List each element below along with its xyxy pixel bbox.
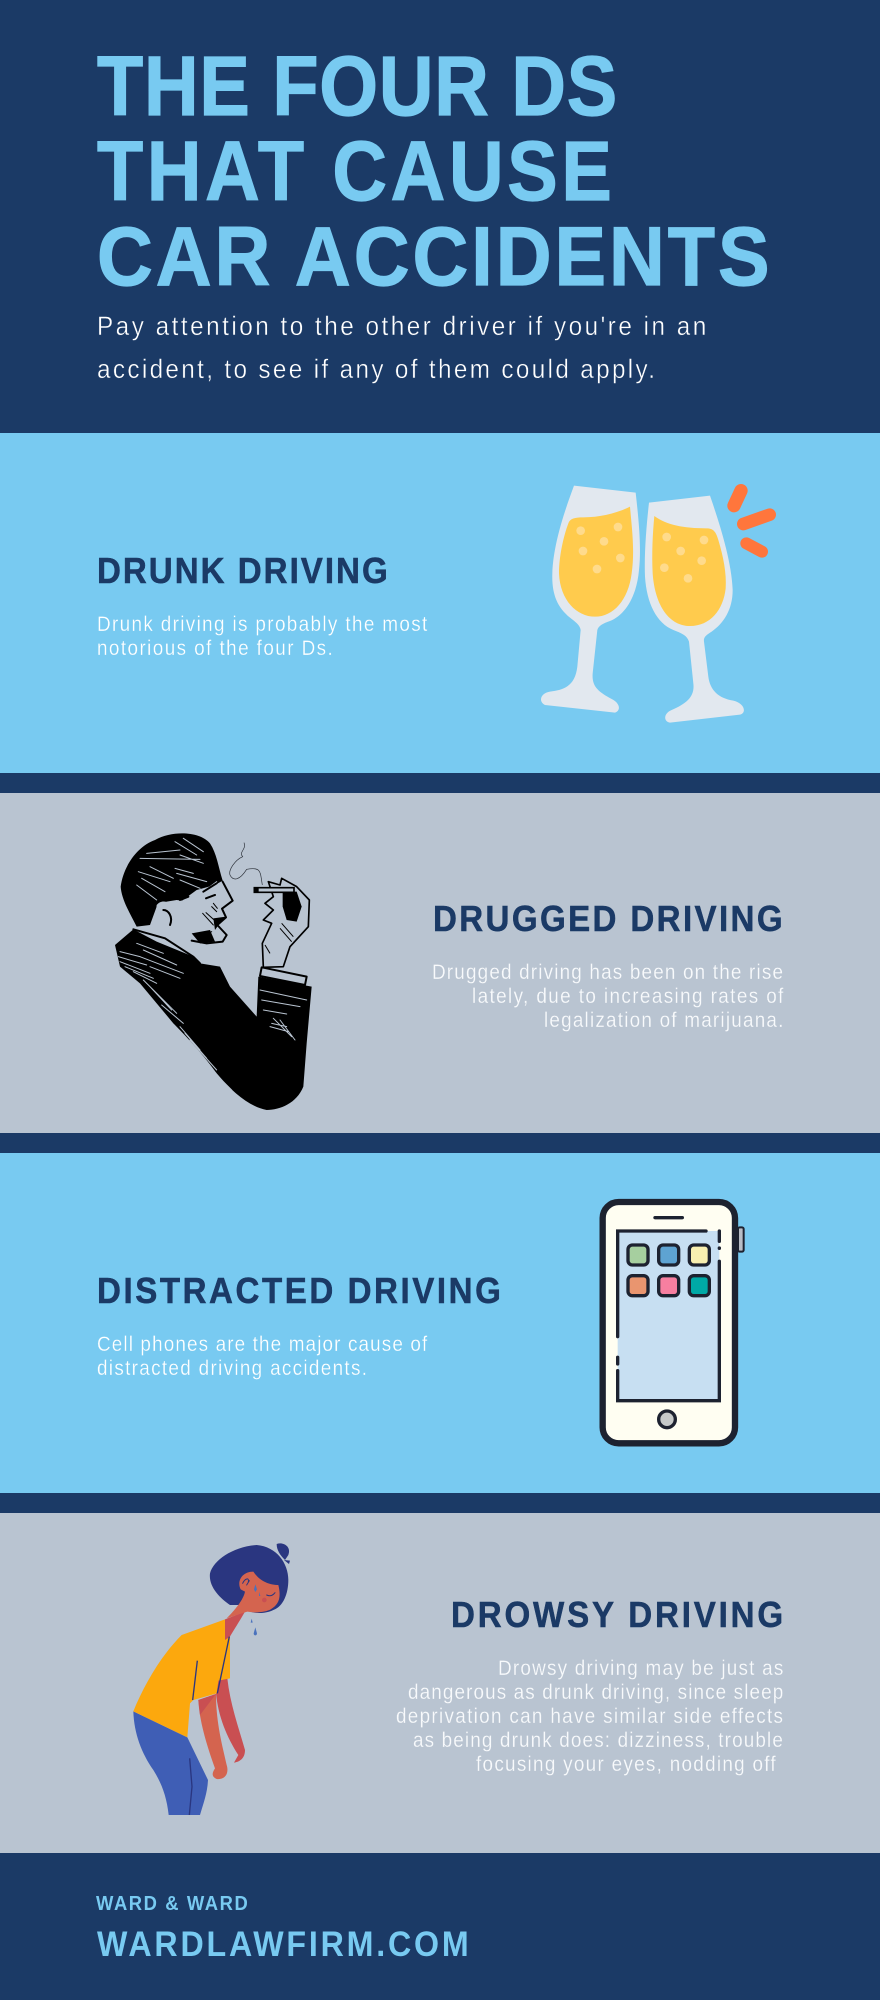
- text: drunk driving: notorious of the four Ds.: [97, 637, 333, 660]
- text: drugged driving: Drugged driving has been on the rise: [432, 961, 783, 984]
- text: drowsy driving: Drowsy driving may be just as: [498, 1657, 783, 1680]
- title: THE FOUR DS: [97, 39, 617, 133]
- text: drugged driving: lately, due to increasing rates of: [472, 985, 784, 1008]
- heading: drugged driving: DRUGGED DRIVING: [433, 900, 783, 939]
- icon: smartphone: [603, 1202, 744, 1443]
- text: distracted driving: distracted driving accidents.: [97, 1357, 367, 1380]
- text: drowsy driving: focusing your eyes, nodding off: [476, 1753, 776, 1776]
- panel: drowsy driving: [0, 1513, 880, 1853]
- text: distracted driving: [97, 1333, 428, 1380]
- divider band: [0, 1493, 880, 1513]
- text: drunk driving: [97, 613, 428, 660]
- icon: champagne glasses: [541, 486, 770, 723]
- divider band: [0, 773, 880, 793]
- title: [97, 39, 770, 304]
- heading: distracted driving: DISTRACTED DRIVING: [97, 1272, 501, 1311]
- panel: distracted driving: [0, 1153, 880, 1493]
- text: drugged driving: [432, 961, 784, 1032]
- subtitle: Pay attention to the other driver if you're in an: [97, 312, 706, 341]
- text: firm name: WARD & WARD: [96, 1893, 248, 1915]
- text: drowsy driving: as being drunk does: dizziness, trouble: [413, 1729, 783, 1752]
- text: drowsy driving: dangerous as drunk driving, since sleep: [408, 1681, 783, 1704]
- text: website: WARDLAWFIRM.COM: [97, 1926, 469, 1964]
- text: distracted driving: Cell phones are the major cause of: [97, 1333, 428, 1356]
- title: CAR ACCIDENTS: [97, 210, 770, 304]
- panel: header: [0, 0, 880, 433]
- panel: drugged driving: [0, 793, 880, 1133]
- panel: drunk driving: [0, 433, 880, 773]
- title: THAT CAUSE: [97, 124, 612, 218]
- text: drunk driving: Drunk driving is probably the most: [97, 613, 428, 636]
- heading: drunk driving: DRUNK DRIVING: [97, 552, 388, 591]
- text: drugged driving: legalization of marijuana.: [544, 1009, 783, 1032]
- panel: footer: [0, 1853, 880, 2000]
- heading: drowsy driving: DROWSY DRIVING: [451, 1596, 783, 1635]
- divider band: [0, 1133, 880, 1153]
- icon: drowsy person: [133, 1543, 290, 1815]
- text: drowsy driving: deprivation can have similar side effects: [396, 1705, 783, 1728]
- icon: man smoking: [115, 833, 312, 1110]
- subtitle: [97, 312, 706, 384]
- subtitle: accident, to see if any of them could apply.: [97, 355, 655, 384]
- text: drowsy driving: [396, 1657, 783, 1776]
